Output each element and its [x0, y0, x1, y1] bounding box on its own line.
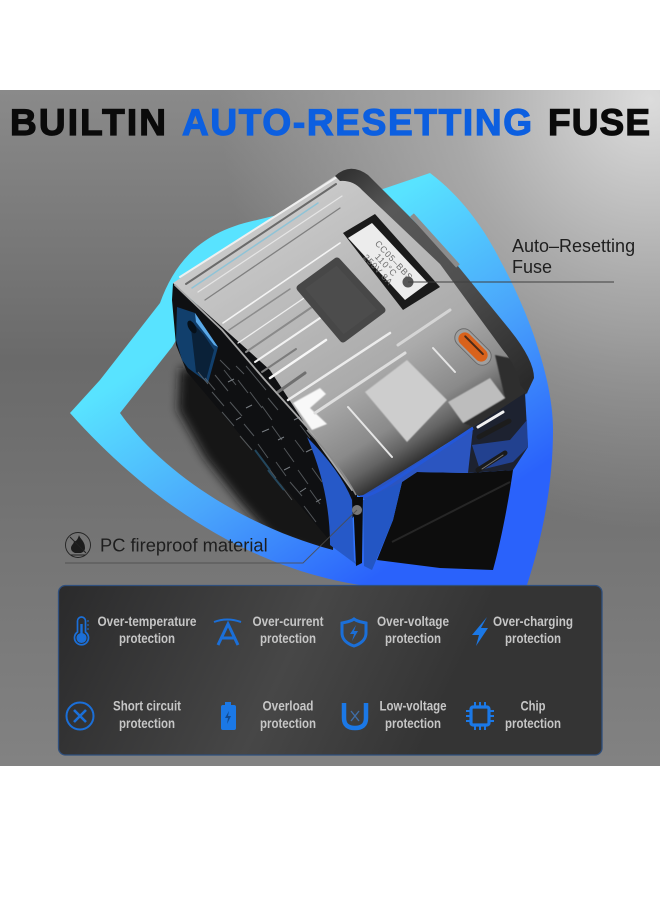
icon: circle cross	[66, 702, 94, 730]
over-voltage: protection	[385, 631, 441, 646]
short circuit: protection	[119, 716, 175, 731]
front blue panel	[360, 428, 473, 503]
fuse label: CC05–BBS	[373, 239, 415, 282]
face light patches	[293, 355, 527, 442]
panel: protections	[58, 586, 602, 755]
front glass	[467, 393, 528, 473]
blue side glow	[472, 420, 528, 470]
title: AUTO-RESETTING	[182, 102, 532, 143]
icon: lightning bolt	[472, 617, 488, 646]
device floor shadow	[178, 368, 345, 565]
left blue glass	[176, 307, 218, 383]
gray rim strip	[412, 215, 458, 266]
device	[172, 169, 534, 570]
over-voltage	[342, 614, 449, 646]
fuse label	[348, 223, 428, 300]
over-temperature: protection	[119, 631, 175, 646]
icon: shield bolt	[342, 619, 366, 646]
over-charging	[472, 614, 573, 646]
callout: auto-resetting fuse	[402, 236, 635, 288]
icon: chip	[466, 702, 494, 730]
fuse label: 250V 8A	[361, 252, 395, 287]
corner post	[353, 497, 363, 566]
right blue leg	[363, 482, 402, 570]
chip: protection	[505, 716, 561, 731]
callout: PC fireproof material	[65, 505, 362, 563]
rubber pad	[300, 261, 382, 339]
USB-C port	[451, 325, 495, 369]
fuse label: 110°C	[373, 252, 399, 279]
short circuit: Short circuit	[113, 698, 181, 714]
left circuit face	[172, 283, 357, 545]
callout: auto-resetting fuse: Fuse	[512, 257, 552, 277]
overload: Overload	[262, 698, 314, 714]
icon: no-fire	[66, 532, 90, 558]
chip: Chip	[520, 698, 546, 714]
over-charging: Over-charging	[493, 614, 573, 629]
device underside shadow	[377, 470, 513, 570]
chip	[466, 698, 561, 731]
short circuit	[66, 698, 181, 731]
circuit board details	[198, 360, 338, 522]
title: FUSE	[548, 102, 650, 143]
over-charging: protection	[505, 631, 561, 646]
fuse slot	[343, 214, 440, 310]
top translucent face	[173, 173, 528, 496]
left blue leg	[307, 437, 357, 565]
over-current: Over-current	[252, 614, 324, 629]
ports	[478, 412, 509, 470]
over-current	[214, 614, 324, 646]
low-voltage	[344, 698, 447, 731]
icon: thermometer	[75, 617, 89, 645]
low-voltage: protection	[385, 716, 441, 731]
low-voltage: Low-voltage	[380, 698, 447, 714]
title: BUILTIN	[10, 102, 166, 143]
overload: protection	[260, 716, 316, 731]
dark rounded top edge	[335, 169, 534, 393]
shield outline	[70, 173, 553, 585]
icon: battery	[221, 702, 236, 730]
over-temperature: Over-temperature	[98, 614, 197, 629]
callout: PC fireproof material: PC fireproof material	[100, 534, 268, 556]
background	[0, 90, 660, 766]
over-temperature	[75, 614, 197, 646]
icon: ampere	[214, 620, 241, 645]
edge highlight	[307, 430, 356, 495]
callout: auto-resetting fuse: Auto–Resetting	[512, 236, 635, 256]
blue front edge	[360, 428, 473, 497]
glass ridges	[175, 177, 455, 490]
over-current: protection	[260, 631, 316, 646]
overload	[221, 698, 316, 731]
title	[10, 102, 650, 143]
over-voltage: Over-voltage	[377, 614, 449, 629]
icon: U cross	[344, 703, 366, 728]
